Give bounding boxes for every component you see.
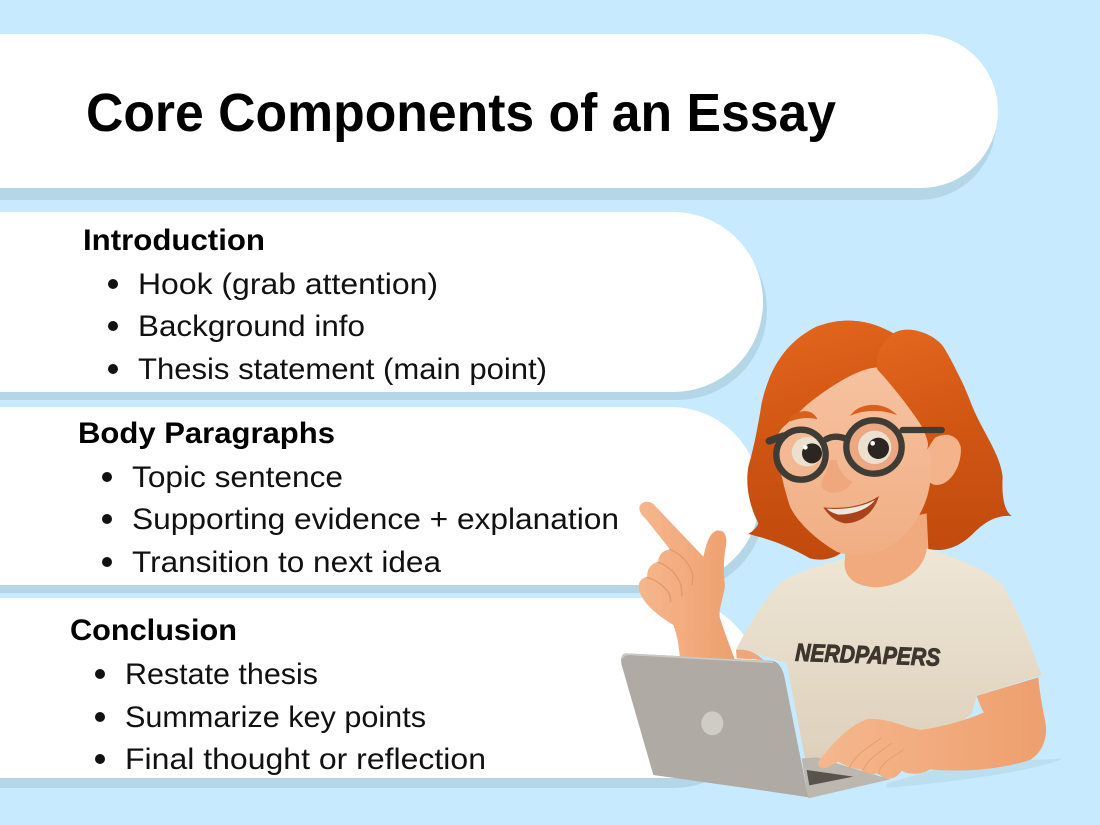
lens tint [848, 422, 900, 472]
list: introduction points: Background info [138, 310, 365, 343]
list: body paragraph points: Transition to next idea [132, 546, 441, 579]
hair top left lobe [757, 321, 893, 440]
ear [926, 435, 961, 485]
laptop base [802, 757, 890, 798]
laptop lid edge [622, 654, 773, 662]
shirt logo: NERDPAPERS [795, 640, 941, 672]
pointing hand [639, 502, 735, 660]
laptop lid [621, 653, 808, 797]
title: Core Components of an Essay [86, 83, 836, 143]
list: conclusion points [95, 658, 486, 776]
eye pupils [802, 438, 889, 463]
curled fingers [647, 549, 693, 602]
list: body paragraph points: Supporting evidence + explanation [132, 503, 619, 536]
list: introduction points [108, 268, 547, 386]
panel: introduction [0, 212, 767, 400]
desk shadow [887, 759, 1063, 788]
glasses [769, 420, 942, 480]
title panel [0, 34, 998, 200]
mouth [823, 496, 879, 523]
hair top right lobe [877, 330, 983, 450]
heading: introduction: Introduction [83, 224, 265, 257]
eye whites [788, 431, 891, 470]
teeth [827, 500, 875, 515]
list: body paragraph points [102, 461, 619, 579]
list: introduction points: Hook (grab attention) [138, 268, 438, 301]
sleeve arm stub [736, 650, 763, 660]
list: conclusion points: Final thought or reflection [125, 743, 486, 776]
laptop keyboard [807, 770, 853, 785]
typing arm and hand [818, 677, 1046, 779]
list: body paragraph points: Topic sentence [132, 461, 343, 494]
list: conclusion points: Restate thesis [125, 658, 318, 691]
heading: body paragraphs: Body Paragraphs [78, 417, 335, 450]
list: conclusion points: Summarize key points [125, 701, 426, 734]
shirt [736, 548, 1042, 767]
neck [844, 513, 928, 587]
nose [821, 460, 853, 493]
laptop logo [701, 711, 723, 735]
heading: conclusion: Conclusion [70, 614, 237, 647]
eyebrows [790, 405, 897, 422]
illustration: woman with laptop [621, 321, 1063, 798]
head [757, 321, 983, 555]
panel: conclusion [0, 598, 764, 788]
typing fingers [849, 738, 903, 774]
hair back [747, 321, 1012, 560]
face [775, 367, 931, 555]
panel: body paragraphs [0, 407, 765, 593]
list: introduction points: Thesis statement (main point) [138, 353, 547, 386]
